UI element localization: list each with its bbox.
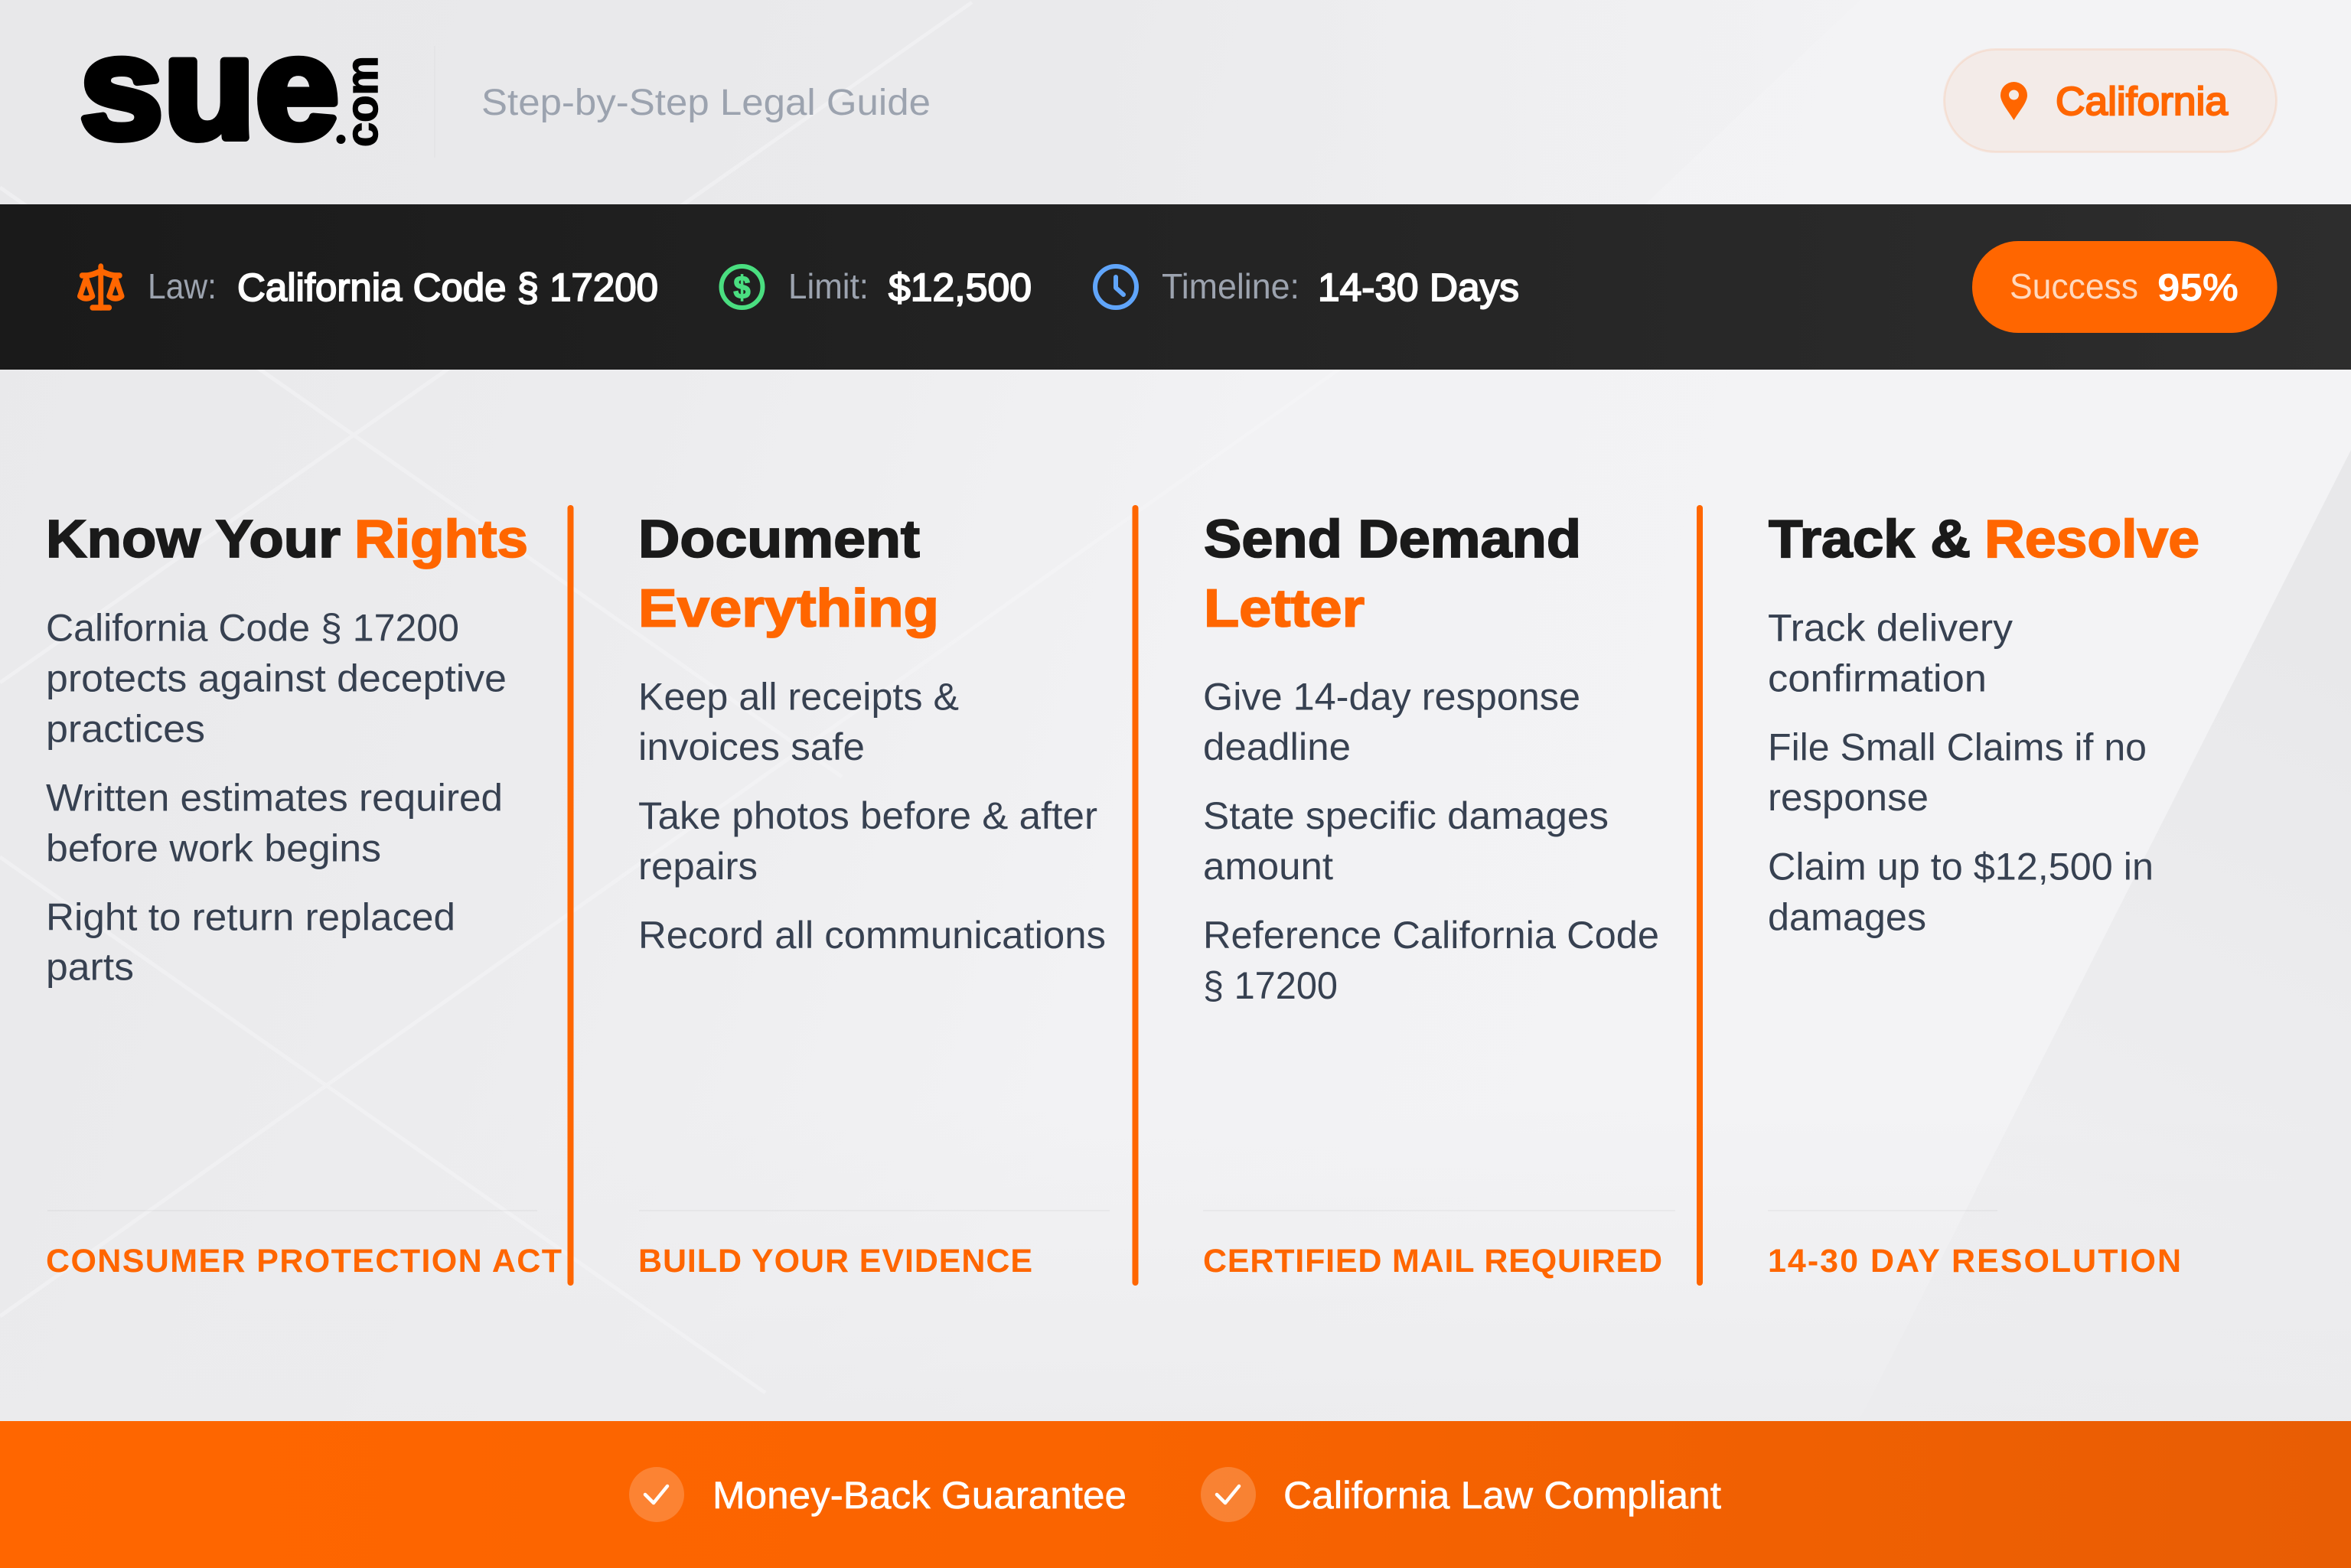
bullet text: repairs xyxy=(638,845,758,888)
stat: limit: Limit: xyxy=(788,266,869,306)
heading xyxy=(638,509,939,638)
logo: sue.com: sue xyxy=(80,7,339,169)
bullet text: Give 14-day response xyxy=(1203,675,1580,718)
bullet text: Track delivery xyxy=(1768,606,2013,649)
bullet text xyxy=(638,675,1106,957)
badge: california law compliant: California Law Compliant xyxy=(1283,1474,1721,1517)
column: document everything xyxy=(638,505,1139,1286)
bullet text: confirmation xyxy=(1768,657,1987,699)
bullet text: Take photos before & after xyxy=(638,794,1097,837)
heading: Resolve xyxy=(1984,509,2199,569)
column: track and resolve xyxy=(1768,509,2199,1280)
bullet text: Keep all receipts & xyxy=(638,675,959,718)
bullet text: Reference California Code xyxy=(1203,914,1659,957)
heading xyxy=(1769,509,2199,569)
bullet text xyxy=(1203,675,1659,1007)
tag line: CERTIFIED MAIL REQUIRED xyxy=(1203,1243,1662,1280)
bullet text: response xyxy=(1768,776,1929,819)
heading xyxy=(46,509,528,569)
success badge xyxy=(1972,241,2278,333)
badge: money-back guarantee xyxy=(629,1467,1127,1522)
stat: limit: $12,500 xyxy=(889,266,1032,309)
success badge: Success xyxy=(2010,266,2138,306)
icon: dollar xyxy=(721,266,762,308)
tag line: 14-30 DAY RESOLUTION xyxy=(1768,1243,2181,1280)
bullet text: deadline xyxy=(1203,725,1351,768)
tag line: CONSUMER PROTECTION ACT xyxy=(46,1243,562,1280)
badge: california law compliant xyxy=(1201,1467,1721,1522)
heading: Rights xyxy=(354,509,528,569)
stat: law: California Code § 17200 xyxy=(237,266,658,309)
stat: timeline xyxy=(1095,266,1519,309)
header xyxy=(80,7,2276,169)
bullet text: Claim up to $12,500 in xyxy=(1768,845,2154,888)
bullet text: invoices safe xyxy=(638,725,865,768)
bullet text: File Small Claims if no xyxy=(1768,725,2147,768)
stat: law: Law: xyxy=(148,266,217,306)
column: send demand letter xyxy=(1203,505,1703,1286)
heading: Send Demand xyxy=(1204,509,1581,569)
bullet text: Right to return replaced xyxy=(46,895,455,938)
footer guarantee bar xyxy=(0,1421,2351,1568)
bullet text: State specific damages xyxy=(1203,794,1609,837)
badge: money-back guarantee: Money-Back Guarantee xyxy=(712,1474,1127,1517)
icon: clock xyxy=(1095,266,1136,308)
bullet text: practices xyxy=(46,707,205,750)
icon: scales of justice xyxy=(80,266,122,308)
bullet text xyxy=(46,606,507,989)
heading: Letter xyxy=(1204,579,1365,638)
bullet text: amount xyxy=(1203,845,1333,888)
heading: Know Your xyxy=(46,509,341,569)
icon: dollar: $ xyxy=(733,269,750,305)
success badge: 95% xyxy=(2157,266,2239,309)
heading xyxy=(1204,509,1581,638)
bullet text: Written estimates required xyxy=(46,776,503,819)
state badge: California xyxy=(1944,49,2276,152)
bullet text: parts xyxy=(46,946,134,989)
heading: Everything xyxy=(638,579,939,638)
tagline: Step-by-Step Legal Guide xyxy=(481,83,931,123)
bullet text xyxy=(1768,606,2154,938)
heading: Document xyxy=(638,509,920,569)
tag line: BUILD YOUR EVIDENCE xyxy=(638,1243,1032,1280)
state badge: California: California xyxy=(2056,80,2228,124)
bullet text: protects against deceptive xyxy=(46,657,507,699)
bullet text: damages xyxy=(1768,895,1926,938)
stat: timeline: 14-30 Days xyxy=(1318,266,1519,309)
heading: Track & xyxy=(1769,509,1971,569)
stat: limit xyxy=(721,266,1032,309)
bullet text: before work begins xyxy=(46,826,381,869)
stats bar xyxy=(0,204,2351,370)
bullet text: § 17200 xyxy=(1203,964,1338,1007)
stat: timeline: Timeline: xyxy=(1162,266,1299,306)
column: know your rights xyxy=(46,505,574,1286)
logo: sue.com: com xyxy=(337,56,387,147)
bullet text: Record all communications xyxy=(638,914,1106,957)
bullet text: California Code § 17200 xyxy=(46,606,459,649)
